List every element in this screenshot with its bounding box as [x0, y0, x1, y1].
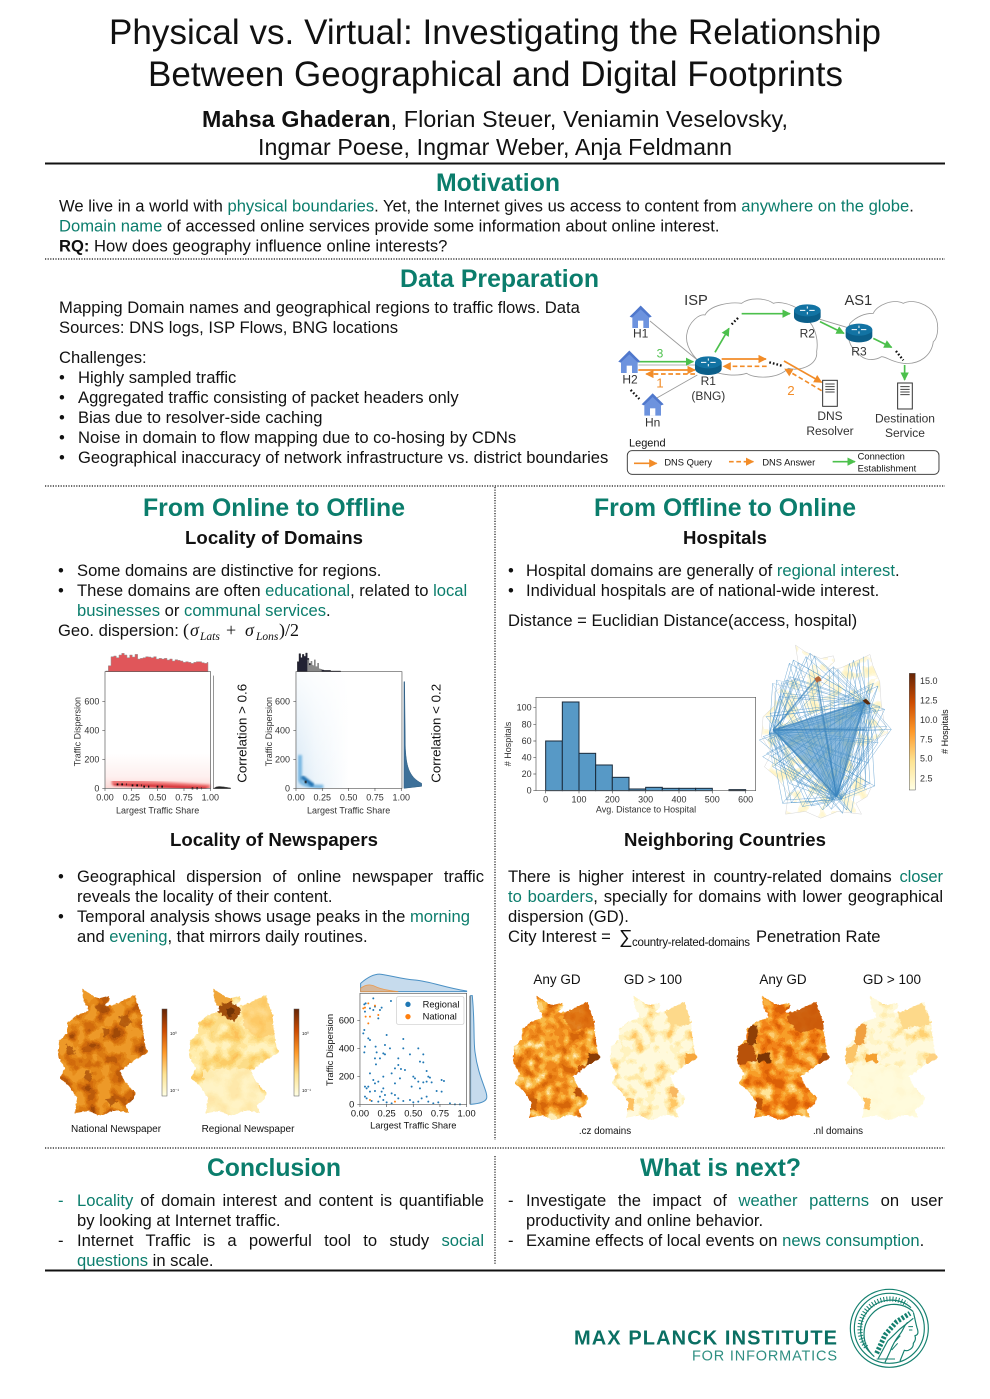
subheading: locality of newspapers: Locality of Newspapers	[170, 829, 378, 850]
map: nl GD above 100: .nl domains	[813, 1126, 863, 1137]
legend: scatter: National	[423, 1012, 457, 1022]
logo: max planck institute: MAX PLANCK INSTITUTE	[574, 1328, 837, 1350]
text block: motivation: Domain name of accessed online services provide some information about online interest.	[59, 216, 719, 236]
diagram labels: DNS	[817, 409, 843, 423]
text block: hospitals	[508, 561, 900, 630]
map: nl GD above 100: GD > 100	[863, 972, 921, 987]
diagram labels: Destination	[875, 411, 935, 425]
chart: histogram: 400	[671, 794, 686, 804]
map: national newspaper: 10⁻¹	[170, 1088, 179, 1093]
chart: histogram	[503, 697, 756, 815]
chart: histogram: # Hospitals	[503, 721, 513, 766]
diagram labels	[622, 293, 935, 440]
map: national newspaper	[58, 988, 179, 1135]
text block: locality of newspapers: •	[58, 867, 64, 886]
text block: locality of newspapers: and evening, that mirrors daily routines.	[77, 927, 368, 946]
diagram labels: 3	[657, 346, 664, 360]
legend: Connection	[858, 451, 905, 461]
formula: geo dispersion: Geo. dispersion:	[58, 621, 179, 640]
text block: locality of newspapers	[58, 867, 484, 946]
chart: red hexbin correlation above 0.6: Correlation > 0.6	[235, 684, 250, 783]
chart: red hexbin correlation above 0.6: 0.50	[149, 792, 166, 802]
formula: city interest: City Interest =	[508, 927, 611, 946]
formula: geo dispersion	[58, 620, 299, 643]
formula: city interest: Penetration Rate	[756, 927, 881, 946]
cloud: ISP	[686, 299, 817, 377]
map: regional newspaper: Regional Newspaper	[202, 1124, 295, 1135]
formula: geo dispersion: σ	[190, 620, 200, 640]
colorbar: hospitals: 2.5	[920, 773, 932, 783]
legend: DNS Answer	[762, 457, 815, 467]
map: national newspaper: 10⁰	[170, 1031, 177, 1036]
colorbar: hospitals: 15.0	[920, 676, 937, 686]
text block: conclusion: by looking at Internet traffic.	[77, 1211, 281, 1230]
title: Physical vs. Virtual: Investigating the Relationship	[109, 13, 881, 52]
arrows: connection establishment	[638, 314, 905, 380]
heading: data preparation: Data Preparation	[400, 266, 599, 293]
text block: challenges: •	[59, 388, 65, 407]
chart: red hexbin correlation above 0.6: Largest Traffic Share	[116, 805, 199, 815]
text block: locality of domains	[58, 561, 467, 620]
formula: city interest: ∑	[619, 927, 633, 948]
chart: histogram: 500	[705, 794, 720, 804]
chart: histogram: 200	[605, 794, 620, 804]
map: nl any GD	[737, 972, 832, 1120]
colorbar: hospitals	[909, 673, 950, 790]
panel: data preparation	[59, 266, 939, 474]
colorbar: hospitals: 12.5	[920, 696, 937, 706]
diagram labels: R2	[800, 326, 815, 340]
chart: blue hexbin correlation below 0.2: 0.00	[287, 792, 305, 802]
map: regional newspaper: 10⁰	[302, 1031, 309, 1036]
text block: what is next: productivity and online behavior.	[526, 1211, 763, 1230]
colorbar: hospitals: 5.0	[920, 754, 932, 764]
text block: motivation	[59, 196, 914, 256]
formula: geo dispersion: Lats	[199, 631, 220, 643]
text block: what is next: Investigate the impact of weather patterns on user	[526, 1191, 943, 1210]
formula: geo dispersion: +	[226, 620, 236, 640]
diagram labels: AS1	[844, 293, 872, 309]
chart: histogram: Avg. Distance to Hospital	[596, 805, 696, 815]
heading: what is next: What is next?	[640, 1155, 801, 1182]
chart: histogram: 0	[543, 794, 548, 804]
text block: locality of newspapers: •	[58, 907, 64, 926]
text block: data sources: Mapping Domain names and geographical regions to traffic flows. Data	[59, 298, 581, 317]
KDE: top	[361, 974, 467, 992]
chart: histogram: 300	[638, 794, 653, 804]
chart: joint plots of domains	[73, 653, 444, 815]
colorbar: hospitals: 7.5	[920, 734, 932, 744]
diagram labels: Hn	[645, 416, 660, 430]
chart: newspaper scatter: Traffic Dispersion	[325, 1014, 335, 1086]
chart: newspaper scatter	[325, 974, 487, 1131]
text block: challenges: Noise in domain to flow mapping due to co-hosing by CDNs	[78, 428, 516, 447]
map: cz GD above 100	[579, 972, 699, 1137]
chart: newspaper scatter: 1.00	[458, 1109, 476, 1119]
formula: city interest	[508, 927, 881, 949]
diagram labels: ISP	[684, 293, 708, 309]
chart: blue hexbin correlation below 0.2: 0	[285, 783, 290, 793]
chart: histogram: 80	[522, 719, 532, 729]
text block: what is next: -	[508, 1191, 514, 1210]
chart: histogram: 600	[738, 794, 753, 804]
icon: minerva seal	[850, 1289, 928, 1367]
legend: scatter	[397, 997, 464, 1024]
heading: from online to offline: From Online to Offline	[143, 495, 405, 522]
chart: red hexbin correlation above 0.6: 400	[84, 725, 99, 735]
cloud: AS1	[848, 302, 938, 364]
chart: newspaper scatter: 0.50	[404, 1109, 422, 1119]
chart: red hexbin correlation above 0.6: 600	[84, 697, 99, 707]
formula: geo dispersion: Lons	[255, 631, 279, 643]
text block: conclusion: -	[58, 1231, 64, 1250]
houses	[618, 306, 664, 416]
chart: blue hexbin correlation below 0.2: 0.75	[366, 792, 384, 802]
text block: challenges: •	[59, 368, 65, 387]
subheading: locality of domains: Locality of Domains	[185, 527, 363, 548]
text block: locality of domains: businesses or communal services.	[77, 601, 331, 620]
text block: challenges: •	[59, 448, 65, 467]
map: hospital network	[759, 645, 891, 818]
chart: blue hexbin correlation below 0.2: Correlation < 0.2	[429, 684, 444, 783]
text block: neighboring countries: There is higher interest in country-related domains closer	[508, 867, 943, 886]
text block: neighboring countries: dispersion (GD).	[508, 907, 629, 926]
chart: red hexbin correlation above 0.6	[73, 653, 250, 815]
routers	[695, 304, 872, 375]
chart: newspaper scatter: 400	[339, 1044, 354, 1054]
text block: conclusion	[58, 1191, 484, 1270]
chart: red hexbin correlation above 0.6: 0.00	[96, 792, 114, 802]
panel: what is next	[508, 1155, 943, 1250]
text block: challenges: Challenges:	[59, 348, 147, 367]
text block: what is next: Examine effects of local events on news consumption.	[526, 1231, 924, 1250]
chart: histogram: 100	[517, 703, 532, 713]
chart: red hexbin correlation above 0.6: 0.75	[175, 792, 193, 802]
text block: what is next: -	[508, 1231, 514, 1250]
text block: motivation: RQ: How does geography influence online interests?	[59, 236, 447, 256]
chart: newspaper scatter: 0.00	[351, 1109, 369, 1119]
heading: from offline to online: From Offline to Online	[594, 495, 856, 522]
logo: max planck institute: FOR INFORMATICS	[692, 1348, 837, 1364]
heading: motivation: Motivation	[436, 170, 560, 197]
text block: conclusion: questions in scale.	[77, 1251, 214, 1270]
heading: conclusion: Conclusion	[207, 1155, 341, 1182]
diagram labels: R3	[851, 345, 867, 359]
formula: city interest: country-related-domains	[632, 937, 750, 949]
chart: newspaper scatter: 200	[339, 1072, 354, 1082]
logo: max planck institute	[574, 1289, 928, 1367]
text block: challenges: Highly sampled traffic	[78, 368, 236, 387]
diagram labels: H1	[633, 327, 649, 341]
formula: geo dispersion: σ	[245, 620, 255, 640]
arrows: DNS query and answer	[638, 359, 822, 391]
chart: blue hexbin correlation below 0.2: 200	[275, 754, 290, 764]
authors: Ingmar Poese, Ingmar Weber, Anja Feldmann	[258, 134, 732, 160]
chart: histogram: 100	[571, 794, 586, 804]
legend: Legend	[629, 438, 666, 450]
authors: Mahsa Ghaderan, Florian Steuer, Veniamin Veselovsky,	[202, 106, 788, 132]
text block: locality of newspapers: Temporal analysis shows usage peaks in the morning	[77, 907, 470, 926]
colorbar: hospitals: # Hospitals	[940, 709, 950, 754]
text block: locality of domains: •	[58, 581, 64, 600]
chart: red hexbin correlation above 0.6: 0	[94, 783, 99, 793]
chart: hospital distance histogram and network map	[503, 645, 950, 818]
text block: conclusion: -	[58, 1191, 64, 1210]
chart: histogram: 60	[522, 736, 532, 746]
map: cz GD above 100: .cz domains	[579, 1126, 631, 1137]
legend: scatter: Regional	[423, 999, 459, 1009]
chart: histogram: 0	[527, 786, 532, 796]
chart: histogram: 40	[522, 752, 532, 762]
authors	[202, 106, 788, 160]
text block: locality of newspapers: reveals the locality of their content.	[77, 887, 332, 906]
chart: red hexbin correlation above 0.6: 0.25	[123, 792, 140, 802]
text block: what is next	[508, 1191, 943, 1250]
text block: challenges: Bias due to resolver-side caching	[78, 408, 322, 427]
chart: newspaper scatter: 0	[349, 1099, 354, 1109]
chart: newspaper scatter: 0.75	[431, 1109, 449, 1119]
map: regional newspaper: 10⁻¹	[302, 1088, 311, 1093]
diagram labels: Resolver	[806, 424, 854, 438]
text block: data sources	[59, 298, 581, 337]
chart: blue hexbin correlation below 0.2: 600	[275, 697, 290, 707]
text block: challenges: Geographical inaccuracy of network infrastructure vs. district boundaries	[78, 448, 608, 467]
diagram labels: Service	[885, 426, 925, 440]
title: Between Geographical and Digital Footprints	[148, 55, 843, 94]
text block: motivation: We live in a world with physical boundaries. Yet, the Internet gives us access to content from anywhere on the globe.	[59, 196, 914, 216]
map: nl any GD: Any GD	[759, 972, 807, 987]
diagram labels: H2	[622, 372, 638, 386]
panel: from offline to online	[503, 495, 950, 1137]
title	[109, 13, 881, 94]
text block: hospitals: Individual hospitals are of national-wide interest.	[526, 581, 879, 600]
text block: hospitals: Distance = Euclidian Distance(access, hospital)	[508, 611, 857, 630]
chart: blue hexbin correlation below 0.2: 400	[275, 725, 290, 735]
map: regional newspaper	[189, 988, 311, 1135]
diagram labels: (BNG)	[691, 389, 725, 403]
map: cz any GD	[513, 972, 602, 1120]
text block: locality of domains: •	[58, 561, 64, 580]
text block: data sources: Sources: DNS logs, ISP Flows, BNG locations	[59, 318, 398, 337]
panel: conclusion	[58, 1155, 484, 1270]
diagram labels: R1	[701, 374, 716, 388]
panel: motivation	[59, 170, 914, 256]
chart: blue hexbin correlation below 0.2: 0.50	[340, 792, 357, 802]
text block: challenges	[59, 348, 608, 467]
chart: red hexbin correlation above 0.6: 1.00	[202, 792, 219, 802]
colorbar: hospitals: 10.0	[920, 715, 937, 725]
text block: hospitals: •	[508, 581, 514, 600]
legend: Establishment	[858, 464, 917, 474]
network diagram	[618, 293, 939, 474]
panel: from online to offline	[58, 495, 487, 1135]
map: national newspaper: National Newspaper	[71, 1124, 162, 1135]
text block: conclusion: Internet Traffic is a powerful tool to study social	[77, 1231, 484, 1250]
text block: neighboring countries	[508, 867, 943, 926]
legend	[627, 438, 939, 474]
chart: red hexbin correlation above 0.6: Traffic Dispersion	[73, 697, 83, 766]
chart: blue hexbin correlation below 0.2: 0.25	[314, 792, 331, 802]
chart: blue hexbin correlation below 0.2: 1.00	[393, 792, 410, 802]
servers	[823, 380, 912, 409]
diagram labels: 2	[787, 383, 795, 398]
text block: hospitals: •	[508, 561, 514, 580]
chart: blue hexbin correlation below 0.2: Traffic Dispersion	[264, 697, 274, 766]
map: nl GD above 100	[813, 972, 940, 1137]
chart: blue hexbin correlation below 0.2	[264, 653, 444, 815]
diagram labels: 1	[656, 376, 664, 391]
chart: newspaper scatter: 600	[339, 1016, 354, 1026]
chart: newspaper scatter: Largest Traffic Share	[370, 1121, 457, 1131]
text block: locality of newspapers: Geographical dispersion of online newspaper traffic	[77, 867, 484, 886]
subheading: hospitals: Hospitals	[683, 527, 767, 548]
map: cz any GD: Any GD	[533, 972, 581, 987]
text block: locality of domains: Some domains are distinctive for regions.	[77, 561, 381, 580]
text block: conclusion: Locality of domain interest and content is quantifiable	[77, 1191, 484, 1210]
formula: geo dispersion: )/2	[279, 620, 299, 641]
text block: hospitals: Hospital domains are generally of regional interest.	[526, 561, 900, 580]
formula: geo dispersion: (	[183, 620, 189, 641]
chart: blue hexbin correlation below 0.2: Largest Traffic Share	[307, 805, 390, 815]
map: cz GD above 100: GD > 100	[624, 972, 682, 987]
chart: histogram: 20	[522, 769, 532, 779]
text block: challenges: •	[59, 408, 65, 427]
text block: neighboring countries: to boarders, specially for domains with lower geographical	[508, 887, 943, 906]
KDE: right	[471, 996, 487, 1104]
chart: red hexbin correlation above 0.6: 200	[84, 754, 99, 764]
text block: challenges: •	[59, 428, 65, 447]
text block: locality of domains: These domains are often educational, related to local	[77, 581, 467, 600]
legend: DNS Query	[664, 457, 712, 467]
scatter points	[363, 998, 460, 1104]
text block: challenges: Aggregated traffic consisting of packet headers only	[78, 388, 459, 407]
chart: newspaper scatter: 0.25	[378, 1109, 396, 1119]
subheading: neighboring countries: Neighboring Countries	[624, 829, 826, 850]
